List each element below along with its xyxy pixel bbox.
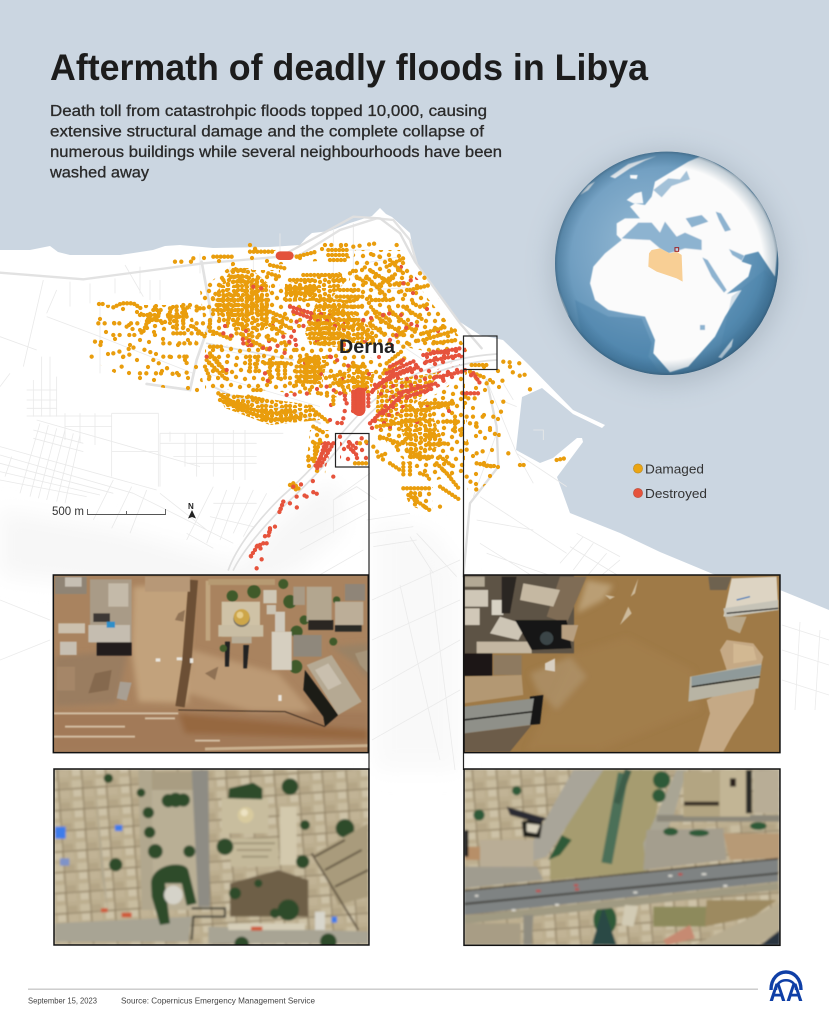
photo: bridge before flood [464, 769, 780, 945]
terrain shading [0, 480, 460, 770]
Derna marker [675, 248, 679, 251]
destroyed blocks [280, 256, 358, 409]
land: Africa and Eurasia [557, 156, 778, 372]
damage points: central Derna [190, 243, 460, 427]
photo: mosque area after flood [53, 575, 368, 753]
globe inset map [555, 151, 779, 375]
street network: east and south [300, 223, 620, 577]
damage cloud: scattered damaged buildings [92, 245, 502, 513]
subtitle: Death toll from catastrohpic floods topped 10,000, causing [50, 103, 487, 120]
connector line: right [462, 369, 464, 770]
globe shadow [553, 154, 781, 382]
damaged building dots [355, 362, 565, 512]
destroyed building dots [207, 277, 460, 427]
footer date: September 15, 2023 [28, 996, 98, 1006]
photo: mosque area before flood [54, 769, 369, 951]
subtitle: washed away [49, 164, 149, 182]
damage points: western outskirts and wadi trail [92, 262, 335, 568]
main roads [0, 218, 417, 423]
footer source: Source: Copernicus Emergency Management Service [121, 996, 316, 1006]
legend: Destroyed [645, 486, 707, 501]
north arrow: N [188, 502, 194, 511]
subtitle [49, 103, 502, 182]
scale bar: 500 m [52, 506, 84, 518]
destroyed building dots [340, 367, 480, 455]
title: Aftermath of deadly floods in Libya [50, 47, 648, 88]
damaged buildings west [92, 262, 325, 490]
destroyed buildings lower wadi [250, 443, 335, 568]
logo: AA: AA [769, 979, 803, 1007]
locator box: bridge area [464, 336, 497, 370]
map label: Derna: Derna [339, 337, 395, 358]
damage cloud: scattered destroyed buildings [220, 262, 466, 470]
land mass [0, 208, 829, 1024]
locator box: mosque area [336, 434, 369, 467]
subtitle: numerous buildings while several neighbourhoods have been [50, 144, 502, 161]
legend: Damaged [645, 462, 704, 476]
subtitle: extensive structural damage and the complete collapse of [50, 124, 485, 140]
north arrow [188, 502, 196, 518]
footer rule [28, 988, 758, 990]
street network: west and south grids [0, 227, 353, 548]
Libya highlight [648, 248, 683, 282]
legend [633, 462, 707, 501]
damage points: south-east Derna [340, 362, 565, 512]
streets beside photo panels [0, 560, 829, 770]
connector line: left [368, 467, 370, 770]
seas [622, 171, 744, 330]
damaged building dots [190, 243, 457, 423]
scale bar [52, 506, 166, 518]
photo: flooded wadi and broken bridge [464, 575, 780, 753]
destroyed block [341, 393, 377, 410]
